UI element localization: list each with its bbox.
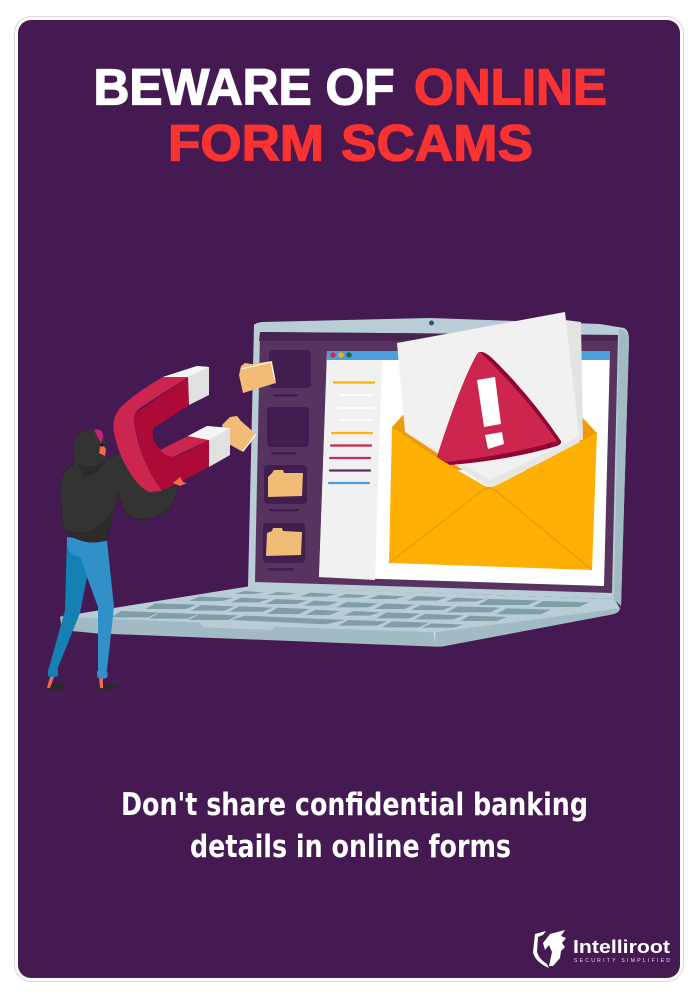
caption [121, 787, 588, 865]
sidebar folder two [266, 528, 302, 556]
title: SCAMS [341, 114, 533, 172]
magnet light outer face [113, 377, 188, 492]
lower arm top face [160, 436, 209, 457]
exclamation mark [477, 377, 504, 449]
warning triangle [437, 352, 561, 465]
logo shield icon [533, 930, 566, 968]
corner highlight [434, 632, 435, 644]
hoodie shadow [65, 510, 113, 542]
keyboard keys [111, 591, 589, 628]
illustration: flying folder two [222, 416, 257, 452]
caption: details in online forms [190, 829, 511, 865]
bottom pole cap [188, 426, 230, 467]
keyboard deck [60, 587, 620, 632]
envelope fold lines [389, 488, 592, 570]
title: FORM [168, 114, 324, 172]
title: BEWARE OF [94, 58, 394, 116]
window buttons [330, 352, 352, 358]
shoes [44, 684, 66, 690]
right leg [67, 537, 114, 670]
envelope back flap [392, 413, 597, 470]
magnet dark inner face [133, 377, 209, 491]
illustration: envelope with warning letter [389, 312, 597, 570]
letter [397, 312, 580, 487]
hood [73, 429, 107, 474]
window title bar [327, 351, 610, 360]
app window [319, 351, 610, 586]
illustration: magnet [113, 366, 230, 492]
left leg [49, 537, 90, 670]
ankles [47, 677, 54, 688]
logo [533, 930, 670, 968]
title: ONLINE [414, 58, 607, 116]
hand [173, 477, 187, 486]
screen bezel [248, 318, 629, 606]
sidebar folder one [268, 470, 303, 497]
face and hair [94, 430, 103, 443]
illustration: laptop [60, 318, 629, 647]
illustration: hacker [44, 429, 178, 690]
webcam [429, 320, 434, 326]
envelope front [389, 427, 597, 570]
back sheet [565, 320, 583, 440]
logo wordmark: Intelliroot [573, 937, 670, 957]
window sidebar [319, 360, 382, 580]
logo tagline: SECURITY SIMPLIFIED [574, 958, 670, 964]
cuffs [48, 668, 58, 677]
base front [60, 608, 620, 647]
screen [255, 332, 618, 593]
sidebar icon tiles [263, 350, 311, 570]
sidebar menu lines [329, 382, 374, 483]
title [94, 58, 607, 172]
front lip notch [200, 623, 275, 630]
top pole cap [163, 366, 209, 405]
caption: Don't share confidential banking [121, 787, 588, 823]
hoodie [60, 453, 178, 542]
laptop base and keyboard [60, 587, 620, 647]
illustration: flying folder one [239, 361, 276, 393]
